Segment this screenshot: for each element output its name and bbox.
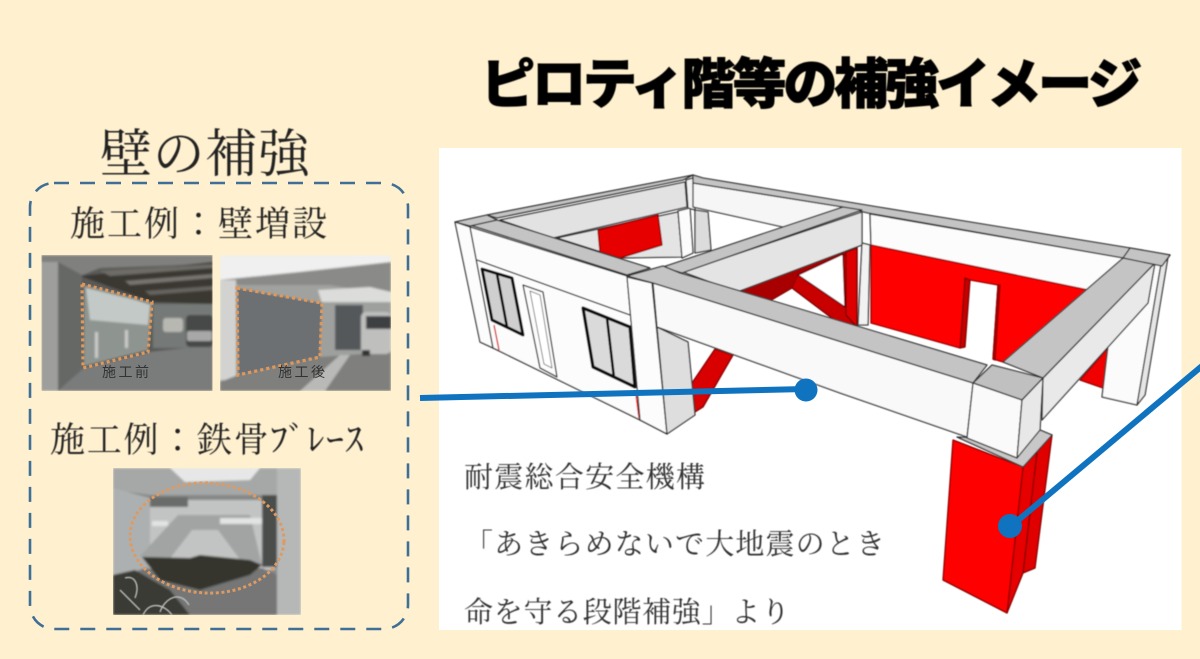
front column side [657,327,695,434]
window 1 mullion [497,274,507,327]
source line 3: 命を守る段階補強」より [464,596,790,629]
left corner cap [455,215,497,226]
back-left inner wall [557,212,682,258]
front wheel arc [160,597,189,612]
door inner [530,291,552,368]
red slit right [636,395,639,418]
photo caption: 施工前 [102,364,149,380]
dotted outline [82,284,152,368]
front column [627,277,667,434]
diagram: reinforced piloti building [455,175,1170,613]
brace web [846,248,857,327]
window 1 [482,269,523,335]
back wall upper face [870,214,1123,290]
corner block top [973,365,1043,400]
photo caption: 施工後 [278,364,325,380]
red jacketed column side 1 [1007,452,1037,613]
source line 1: 耐震総合安全機構 [464,461,705,494]
door reveal [960,278,970,348]
back beam top strip right [693,175,1170,266]
back-right beam face [693,183,843,227]
wall transom line [477,260,630,315]
door reveal right [993,285,1000,360]
title: ピロティ階等の補強イメージ [481,55,1142,115]
door [523,285,557,377]
dotted ellipse [127,479,287,597]
heading: wall reinforcement: 壁の補強 [100,127,311,184]
frame [120,577,140,610]
right column side [1137,257,1168,405]
red jacketed column front [943,440,1023,613]
front-left wall [470,227,640,420]
dotted outline [237,288,322,375]
opening in brace [798,254,845,307]
label: steel brace example: 施工例：鉄骨ﾌﾞﾚｰｽ [50,421,363,460]
callout dot on column [998,514,1022,538]
left end column [455,222,493,348]
red steel brace rear [738,246,857,327]
upper brace flange [738,246,857,302]
back beam top strip left [487,175,693,218]
source note [464,461,885,629]
right beam face [1042,263,1155,420]
red wall behind right column [1080,348,1108,388]
window 2 mullion [607,318,614,378]
window 2 [583,308,635,387]
middle beam face [683,212,862,292]
middle beam top strip [663,207,862,273]
photo: after construction [220,255,391,391]
main red wall with door opening [871,245,1088,362]
left beam top strip [470,220,650,275]
corner block side [1017,378,1043,458]
callout: line to wall reinforcement [420,378,818,402]
column jacket cap [957,430,1052,467]
red jacketed column side 2 [1023,435,1052,573]
back column side [695,210,711,253]
dashed frame [30,183,408,629]
callout dot on beam [794,378,818,402]
rear wheel arc [143,606,172,615]
right corner cap [1123,248,1170,266]
photo: before construction [41,255,213,391]
back column stripe [678,208,693,258]
red wall at rear left [598,215,662,258]
source line 2: 「あきらめないで大地震のとき [464,528,885,561]
long front beam face [653,283,973,437]
middle column [858,243,870,325]
photo: steel brace [113,468,301,615]
label: wall addition example: 施工例：壁増設 [70,205,327,244]
red slit left [494,325,499,350]
long front beam top strip [627,266,987,383]
right beam top strip [1003,258,1155,378]
corner block front [967,383,1022,458]
red steel brace lower leg [692,349,733,412]
back column upper [686,178,695,210]
back-left beam face [500,182,687,238]
callout: line to column reinforcement [998,366,1200,538]
panel: building diagram [439,148,1182,630]
right column [1102,263,1161,405]
panel: wall reinforcement examples [30,183,408,629]
bicycle wheels [120,577,189,615]
